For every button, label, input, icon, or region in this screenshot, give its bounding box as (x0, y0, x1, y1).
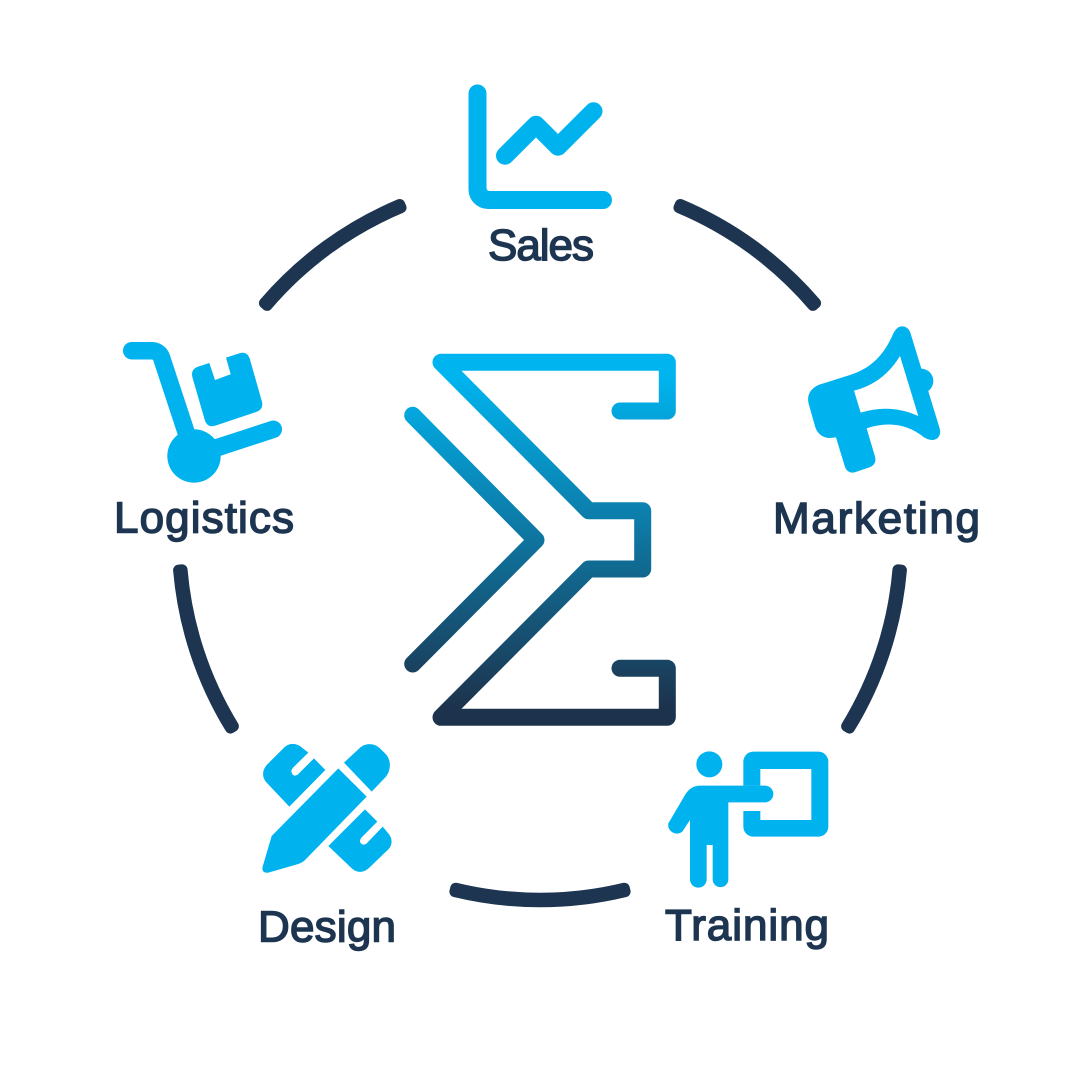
icon: hand truck with box (132, 351, 273, 483)
label: Logistics: Logistics (114, 494, 294, 542)
label: Marketing: Marketing (773, 494, 980, 543)
label: Sales: Sales (488, 221, 594, 270)
icon: sales chart (468, 84, 612, 209)
ring arc segments (179, 204, 901, 902)
label: Training: Training (665, 901, 829, 950)
label: Design: Design (258, 902, 396, 952)
icon: pencil and ruler (262, 744, 392, 873)
icon: presenter with board (668, 751, 828, 888)
icon: megaphone (808, 326, 940, 473)
central sigma logo (413, 362, 667, 717)
